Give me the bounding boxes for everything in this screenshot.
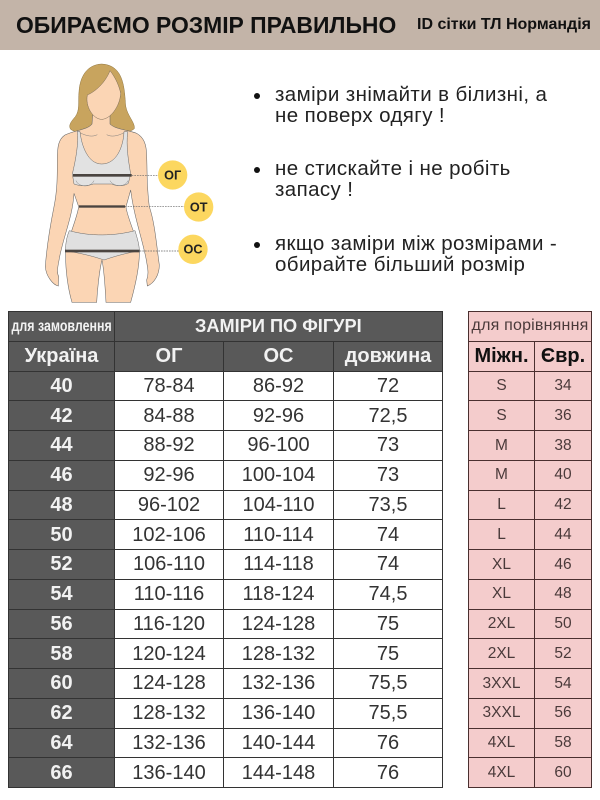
main size table: 44 bbox=[50, 434, 73, 456]
tip 3: обирайте більший розмір bbox=[275, 252, 525, 276]
main size table: 78-84 bbox=[143, 375, 195, 397]
tip 2: запасу ! bbox=[275, 178, 353, 200]
main size table: 73 bbox=[377, 434, 399, 456]
main size table: 106-110 bbox=[133, 553, 205, 575]
comparison size table: 38 bbox=[554, 437, 572, 454]
main size table: 128-132 bbox=[132, 702, 206, 724]
comparison size table: 36 bbox=[554, 407, 572, 424]
tip 3: якщо заміри між розмірами - bbox=[275, 232, 557, 255]
main size table: 75,5 bbox=[369, 672, 407, 694]
comparison size table: 2XL bbox=[488, 645, 515, 662]
comparison size table: M bbox=[495, 466, 508, 483]
label: ОТ: ОТ bbox=[190, 200, 208, 214]
comparison size table: 44 bbox=[554, 526, 572, 543]
comparison size table: 2XL bbox=[488, 615, 515, 632]
icon: body detail lines bbox=[76, 133, 128, 186]
tip 1 bbox=[254, 85, 594, 126]
main size table: 60 bbox=[50, 672, 73, 694]
comparison size table: 42 bbox=[554, 496, 572, 513]
icon: hair bbox=[70, 64, 134, 132]
main size table: 46 bbox=[50, 464, 73, 486]
comparison size table: 50 bbox=[554, 615, 572, 632]
comparison size table: для порівняння bbox=[472, 317, 588, 334]
grid id label: ID сітки ТЛ Нормандія bbox=[417, 16, 591, 33]
main size table: 136-140 bbox=[132, 762, 206, 784]
comparison size table: S bbox=[496, 407, 507, 424]
label: ОГ: ОГ bbox=[164, 168, 181, 182]
main size table: 64 bbox=[50, 732, 73, 754]
icon: face bbox=[87, 71, 121, 119]
main size table: 102-106 bbox=[132, 524, 206, 546]
icon: bra bbox=[72, 131, 131, 186]
main size table: Україна bbox=[25, 345, 98, 367]
comparison size table: 56 bbox=[554, 704, 572, 721]
main size table: 104-110 bbox=[243, 494, 314, 516]
main size table: 74 bbox=[377, 553, 399, 575]
icon: dashed leader lines bbox=[125, 175, 185, 251]
figure illustration with measurement labels bbox=[45, 64, 214, 303]
main size table: для замовлення bbox=[11, 318, 112, 335]
icon: measurement bands bbox=[65, 174, 140, 252]
comparison size table: 48 bbox=[554, 585, 572, 602]
main size table: 58 bbox=[50, 643, 73, 665]
main size table: 75 bbox=[377, 643, 399, 665]
main size table: 75 bbox=[377, 613, 399, 635]
comparison size table: XL bbox=[492, 556, 511, 573]
comparison size table: 34 bbox=[554, 377, 572, 394]
main size table: 132-136 bbox=[242, 672, 315, 694]
main size table: 100-104 bbox=[242, 464, 315, 486]
main size table: 144-148 bbox=[242, 762, 315, 784]
main size table: 48 bbox=[50, 494, 73, 516]
comparison size table: 52 bbox=[554, 645, 572, 662]
comparison size table: L bbox=[497, 496, 506, 513]
main size table: 120-124 bbox=[132, 643, 206, 665]
comparison size table: 54 bbox=[554, 675, 572, 692]
tip 3 bbox=[254, 234, 594, 275]
tip 1: заміри знімайти в білизні, а bbox=[275, 83, 547, 106]
main size table: ОС bbox=[264, 345, 294, 367]
main size table: 116-120 bbox=[133, 613, 205, 635]
comparison size table: 60 bbox=[554, 764, 572, 781]
main size table: 114-118 bbox=[243, 553, 314, 575]
main size table: 88-92 bbox=[143, 434, 195, 456]
tip 1: не поверх одягу ! bbox=[275, 104, 445, 126]
main size table: 74 bbox=[377, 524, 399, 546]
main size table: 50 bbox=[50, 524, 73, 546]
main size table: ОГ bbox=[156, 345, 182, 367]
label: ОС bbox=[178, 235, 208, 264]
main size table: 110-116 bbox=[134, 583, 204, 605]
comparison size table: 3XXL bbox=[483, 704, 520, 721]
comparison size table: Міжн. bbox=[474, 345, 529, 367]
main size table: 76 bbox=[377, 762, 399, 784]
label: ОТ bbox=[184, 192, 213, 222]
comparison size table: 3XXL bbox=[483, 675, 520, 692]
main size table: 140-144 bbox=[242, 732, 315, 754]
main size table: 73,5 bbox=[369, 494, 407, 516]
tip 2: не стискайте і не робіть bbox=[275, 157, 511, 180]
main size table bbox=[8, 311, 443, 788]
main size table: 96-100 bbox=[247, 434, 310, 456]
header band bbox=[0, 0, 600, 50]
main size table: ЗАМІРИ ПО ФІГУРІ bbox=[195, 316, 362, 336]
comparison size table: M bbox=[495, 437, 508, 454]
main size table: 52 bbox=[50, 553, 73, 575]
main size table: 118-124 bbox=[243, 583, 314, 605]
main size table: 75,5 bbox=[369, 702, 407, 724]
comparison size table bbox=[468, 311, 592, 788]
main size table: 96-102 bbox=[138, 494, 200, 516]
main size table: 92-96 bbox=[253, 405, 304, 427]
main size table: довжина bbox=[345, 345, 431, 367]
comparison size table: XL bbox=[492, 585, 511, 602]
icon: body bbox=[45, 115, 159, 302]
comparison size table: 40 bbox=[554, 466, 572, 483]
main size table: 54 bbox=[50, 583, 73, 605]
title: ОБИРАЄМО РОЗМІР ПРАВИЛЬНО bbox=[16, 12, 396, 38]
main size table: 92-96 bbox=[143, 464, 195, 486]
comparison size table: 4XL bbox=[488, 734, 515, 751]
main size table: 40 bbox=[50, 375, 73, 397]
label: ОГ bbox=[158, 160, 187, 190]
main size table: 132-136 bbox=[132, 732, 206, 754]
comparison size table: L bbox=[497, 526, 506, 543]
comparison size table: 46 bbox=[554, 556, 572, 573]
comparison size table: 58 bbox=[554, 734, 572, 751]
main size table: 74,5 bbox=[369, 583, 407, 605]
main size table: 128-132 bbox=[242, 643, 315, 665]
main size table: 73 bbox=[377, 464, 399, 486]
main size table: 136-140 bbox=[242, 702, 315, 724]
comparison size table: Євр. bbox=[541, 345, 585, 367]
main size table: 110-114 bbox=[243, 524, 314, 546]
main size table: 56 bbox=[50, 613, 73, 635]
main size table: 72 bbox=[377, 375, 399, 397]
main size table: 84-88 bbox=[143, 405, 195, 427]
main size table: 42 bbox=[50, 405, 73, 427]
main size table: 124-128 bbox=[242, 613, 315, 635]
comparison size table: S bbox=[496, 377, 507, 394]
main size table: 76 bbox=[377, 732, 399, 754]
label: ОС: ОС bbox=[184, 243, 202, 257]
icon: briefs bbox=[65, 231, 139, 260]
tips list bbox=[254, 83, 557, 276]
main size table: 86-92 bbox=[253, 375, 304, 397]
main size table: 66 bbox=[50, 762, 73, 784]
comparison size table: 4XL bbox=[488, 764, 515, 781]
main size table: 62 bbox=[50, 702, 73, 724]
main size table: 72,5 bbox=[369, 405, 407, 427]
tip 2 bbox=[254, 159, 594, 200]
main size table: 124-128 bbox=[132, 672, 206, 694]
